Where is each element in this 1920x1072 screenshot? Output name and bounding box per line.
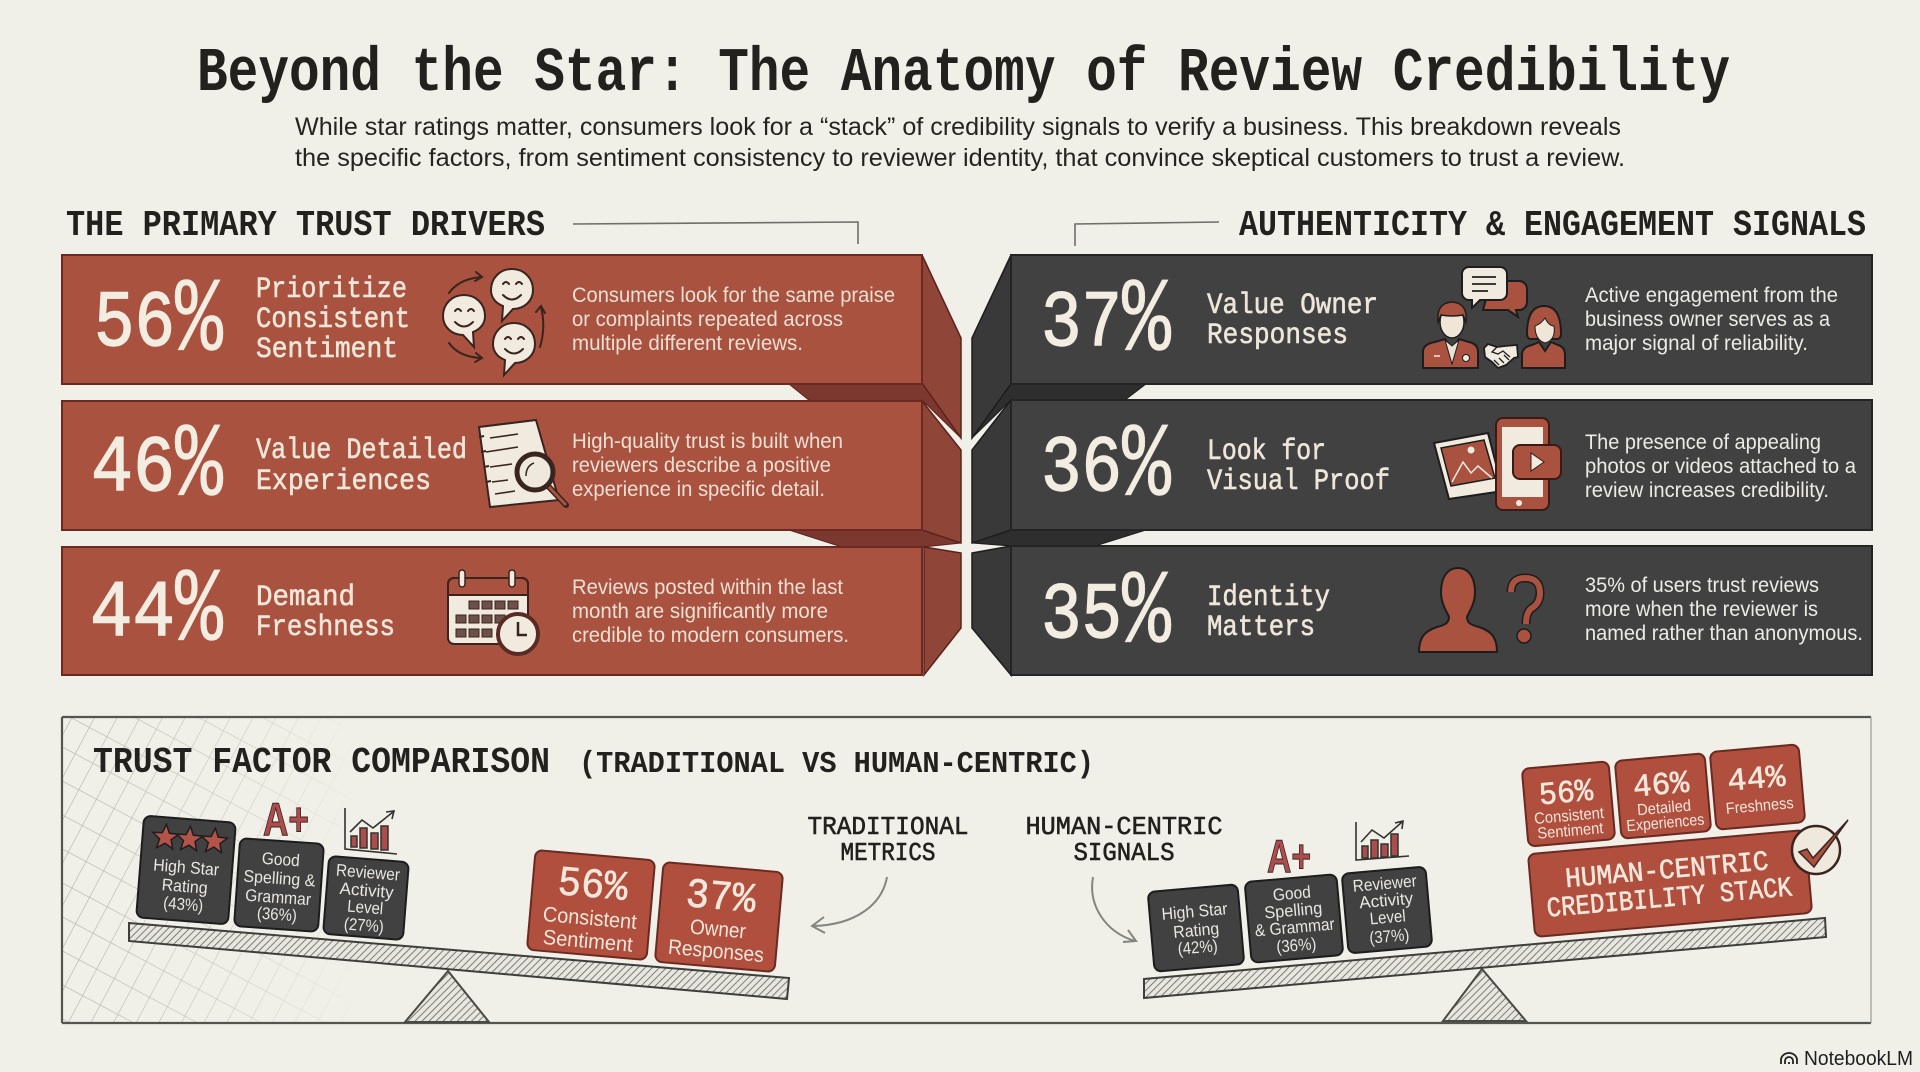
- label: traditional metrics: TRADITIONAL: [808, 812, 968, 842]
- block: spelling and grammar: Spelling &: [243, 867, 317, 891]
- block: high star rating: Rating: [1172, 919, 1220, 942]
- stat: 37%: 37: [1041, 279, 1122, 370]
- comparison heading: [93, 742, 1094, 783]
- icon: check mark: [1792, 820, 1848, 874]
- block: spelling and grammar: Good: [1272, 882, 1312, 905]
- block: 56% consistent sentiment: Consistent: [542, 903, 638, 934]
- row: 56% consistent sentiment: [62, 255, 961, 438]
- description: [572, 284, 895, 355]
- stat: 35%: [1041, 554, 1171, 674]
- block: 37% owner responses: Owner: [689, 916, 747, 943]
- stat: 36%: [1041, 407, 1171, 527]
- label: human-centric signals: SIGNALS: [1074, 838, 1174, 868]
- subtitle: [295, 113, 1625, 172]
- block: high star rating: High Star: [1161, 899, 1229, 924]
- block: spelling and grammar: Good: [261, 849, 300, 870]
- description: Consumers look for the same praise: [572, 284, 895, 307]
- block: 56% consistent sentiment: 56%: [556, 859, 630, 913]
- icon: bar chart: [345, 808, 397, 854]
- row: 35% identity: [972, 546, 1872, 675]
- subtitle: While star ratings matter, consumers look for a “stack” of credibility signals to verify a business. This breakdown reveals: [295, 113, 1621, 141]
- block: high star rating: High Star: [153, 855, 220, 880]
- label: traditional metrics: [808, 812, 968, 868]
- description: more when the reviewer is: [1585, 598, 1818, 621]
- description: named rather than anonymous.: [1585, 622, 1863, 645]
- beam: [129, 923, 789, 999]
- stat: 44%: [90, 552, 223, 672]
- block: spelling and grammar: [234, 838, 324, 932]
- description: photos or videos attached to a: [1585, 455, 1856, 478]
- block: 56% consistent sentiment: [1522, 761, 1615, 847]
- block: high star rating: [136, 816, 236, 924]
- block: 56% consistent sentiment: [527, 850, 655, 960]
- label: traditional metrics: METRICS: [840, 838, 936, 868]
- icon: A+: A+: [263, 793, 309, 845]
- chart: traditional seesaw: [129, 793, 789, 1022]
- block: high star rating: (43%): [163, 893, 204, 915]
- icon: photo and phone with video: [1434, 418, 1561, 510]
- stars: [152, 823, 228, 853]
- block: reviewer activity level: (27%): [343, 914, 385, 936]
- fulcrum: [405, 971, 489, 1022]
- block: spelling and grammar: Grammar: [245, 886, 312, 909]
- description: [1585, 431, 1856, 502]
- block: 56% consistent sentiment: Consistent: [1533, 805, 1605, 828]
- icon: bar chart: [1356, 821, 1409, 860]
- block: human-centric credibility stack: [1528, 830, 1812, 937]
- stat: 56%: 56: [94, 279, 175, 370]
- row: 37% owner responses: [972, 255, 1872, 438]
- block: reviewer activity level: (37%): [1369, 925, 1410, 948]
- description: 35% of users trust reviews: [1585, 574, 1819, 597]
- arrow: to traditional scale: [812, 877, 887, 933]
- description: experience in specific detail.: [572, 478, 825, 501]
- label: Responses: [1207, 319, 1348, 353]
- subtitle: the specific factors, from sentiment consistency to reviewer identity, that convince skeptical customers to trust a review.: [295, 144, 1625, 172]
- block: 46% detailed experiences: [1615, 753, 1711, 839]
- stat: 35%: 35: [1041, 571, 1122, 662]
- arrow: to human-centric scale: [1092, 877, 1136, 942]
- panel: primary trust drivers: [62, 255, 961, 675]
- label: [1207, 435, 1390, 499]
- icon: owner and customer handshake: [1423, 267, 1565, 368]
- block: reviewer activity level: Level: [1369, 906, 1406, 929]
- stat: 46%: %: [175, 407, 223, 527]
- label: Consistent: [256, 303, 410, 337]
- block: 46% detailed experiences: Detailed: [1636, 798, 1692, 819]
- block: high star rating: Rating: [161, 875, 208, 898]
- label: Demand: [256, 581, 355, 615]
- block: 37% owner responses: [655, 862, 783, 972]
- description: multiple different reviews.: [572, 332, 803, 355]
- block: reviewer activity level: [323, 856, 409, 940]
- block: reviewer activity level: Reviewer: [335, 861, 401, 885]
- icon: A+: A+: [1267, 830, 1311, 882]
- panel: authenticity and engagement signals: [972, 255, 1872, 675]
- label: Value Detailed: [256, 434, 467, 468]
- description: [1585, 284, 1838, 355]
- description: High-quality trust is built when: [572, 430, 843, 453]
- description: [572, 576, 849, 647]
- block: 56% consistent sentiment: Sentiment: [1537, 820, 1605, 843]
- label: Freshness: [256, 611, 395, 645]
- heading: primary trust drivers: [66, 205, 858, 246]
- block: 56% consistent sentiment: Sentiment: [542, 926, 634, 957]
- block: 44% freshness: Freshness: [1725, 795, 1794, 818]
- label: Experiences: [256, 465, 431, 499]
- block: reviewer activity level: [1342, 866, 1432, 954]
- icon: speech bubbles cycle: [443, 269, 545, 375]
- description: [572, 430, 843, 501]
- fulcrum: [1443, 969, 1526, 1021]
- icon: calendar and clock: [448, 570, 538, 654]
- block: 37% owner responses: Responses: [667, 936, 765, 967]
- stat: 37%: %: [1122, 262, 1171, 382]
- heading: primary trust drivers: THE PRIMARY TRUST DRIVERS: [66, 205, 545, 246]
- block: reviewer activity level: Level: [347, 897, 384, 918]
- description: [1585, 574, 1863, 645]
- description: or complaints repeated across: [572, 308, 843, 331]
- stat: 37%: [1041, 262, 1171, 382]
- stat: 46%: 46: [91, 424, 175, 515]
- description: month are significantly more: [572, 600, 828, 623]
- label: human-centric signals: [1026, 812, 1222, 868]
- block: spelling and grammar: [1245, 874, 1343, 963]
- chart: human-centric seesaw: [1144, 744, 1848, 1021]
- label: Sentiment: [256, 333, 398, 367]
- stat: 35%: %: [1122, 554, 1171, 674]
- label: [256, 273, 410, 367]
- block: 44% freshness: 44%: [1726, 759, 1788, 801]
- block: 46% detailed experiences: 46%: [1632, 765, 1691, 806]
- label: [256, 434, 467, 499]
- stat: 44%: %: [175, 552, 223, 672]
- beam: [1144, 918, 1826, 998]
- label: Matters: [1207, 611, 1315, 645]
- block: spelling and grammar: Spelling: [1264, 899, 1323, 923]
- description: The presence of appealing: [1585, 431, 1821, 454]
- block: spelling and grammar: (36%): [1276, 934, 1317, 957]
- description: Reviews posted within the last: [572, 576, 843, 599]
- label: [256, 581, 395, 645]
- block: human-centric credibility stack: HUMAN-CENTRIC: [1564, 847, 1770, 896]
- label: Look for: [1207, 435, 1326, 469]
- description: business owner serves as a: [1585, 308, 1830, 331]
- row: 46% detailed experiences: [62, 401, 961, 547]
- block: reviewer activity level: Activity: [1358, 889, 1414, 912]
- label: [1207, 581, 1330, 645]
- row: 36% visual proof: [972, 400, 1872, 546]
- stat: 46%: [91, 407, 223, 527]
- stat: 56%: %: [175, 262, 223, 382]
- block: reviewer activity level: Reviewer: [1352, 871, 1418, 896]
- block: 46% detailed experiences: Experiences: [1626, 812, 1705, 835]
- stat: 56%: [94, 262, 223, 382]
- description: credible to modern consumers.: [572, 624, 849, 647]
- label: Value Owner: [1207, 289, 1378, 323]
- label: human-centric signals: HUMAN-CENTRIC: [1026, 812, 1222, 842]
- block: 56% consistent sentiment: 56%: [1538, 773, 1595, 814]
- label: Prioritize: [256, 273, 407, 307]
- description: Active engagement from the: [1585, 284, 1838, 307]
- label: Identity: [1207, 581, 1330, 615]
- block: 37% owner responses: 37%: [684, 871, 758, 925]
- stat: 44%: 44: [90, 569, 175, 660]
- block: reviewer activity level: Activity: [339, 879, 395, 902]
- block: human-centric credibility stack: CREDIBILITY STACK: [1546, 873, 1793, 926]
- icon: notebook and magnifier: [479, 420, 566, 507]
- panel: trust factor comparison: [62, 717, 1871, 1023]
- block: 44% freshness: [1710, 744, 1805, 830]
- block: spelling and grammar: & Grammar: [1254, 914, 1336, 940]
- comparison heading: TRUST FACTOR COMPARISON: [93, 742, 550, 783]
- block: high star rating: [1148, 884, 1244, 972]
- stat: 36%: %: [1122, 407, 1171, 527]
- block: spelling and grammar: (36%): [256, 904, 298, 925]
- block: high star rating: (42%): [1177, 936, 1218, 959]
- description: review increases credibility.: [1585, 479, 1829, 502]
- label: [1207, 289, 1378, 353]
- row: 44% freshness: [62, 547, 961, 675]
- logo: NotebookLM: NotebookLM: [1804, 1048, 1913, 1070]
- comparison heading: (TRADITIONAL VS HUMAN-CENTRIC): [579, 747, 1094, 782]
- stat: 36%: 36: [1041, 424, 1122, 515]
- description: reviewers describe a positive: [572, 454, 831, 477]
- icon: anonymous person with question mark: [1419, 568, 1540, 652]
- description: major signal of reliability.: [1585, 332, 1808, 355]
- label: Visual Proof: [1207, 465, 1390, 499]
